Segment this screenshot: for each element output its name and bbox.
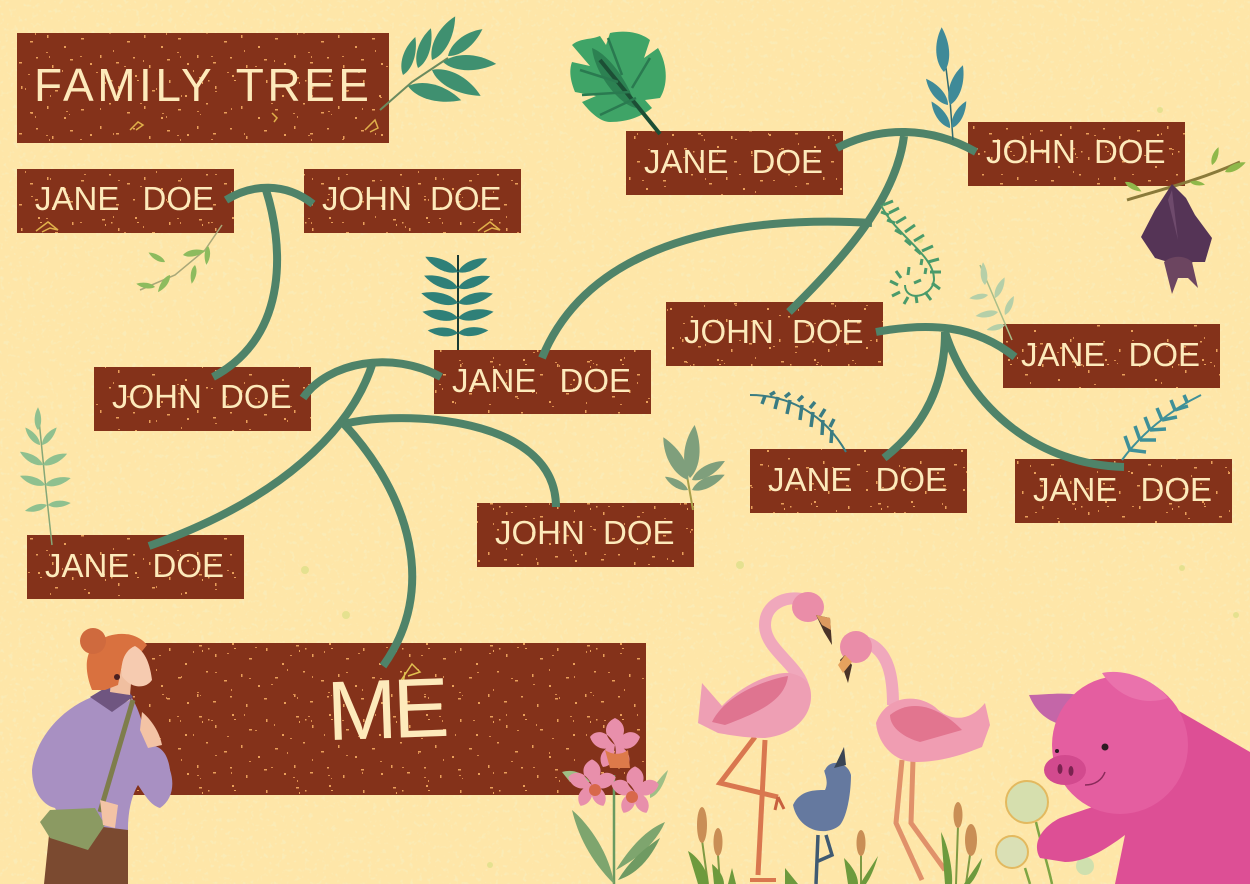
name box: Jane Doe, lower centre right: JANE DOE: [768, 461, 947, 498]
name box: John Doe, top right: JOHN DOE: [986, 133, 1166, 170]
icon: dark feather frond: [750, 392, 846, 452]
name box: Jane Doe, lower left: [27, 535, 244, 599]
icon: blue-green sprig: [922, 27, 970, 140]
icon: broad leaf cluster: [657, 424, 728, 510]
illustration: cattails and reeds: [688, 802, 982, 884]
name box: John Doe, middle left: JOHN DOE: [112, 378, 292, 415]
name box: John Doe, lower centre: JOHN DOE: [495, 514, 675, 551]
name box: Jane Doe, lower right: [1015, 459, 1232, 523]
name box: Jane Doe, top centre: JANE DOE: [644, 143, 823, 180]
name box: John Doe, middle left: [94, 367, 311, 431]
title: FAMILY TREE: [34, 59, 372, 111]
icon: teal fern frond: [1122, 395, 1201, 460]
name box: John Doe, centre right: JOHN DOE: [684, 313, 864, 350]
icon: pale leaf sprig, left: [18, 407, 72, 545]
illustration: flamingo, right: [838, 631, 990, 880]
icon: monstera leaf: [570, 32, 666, 134]
name box: Jane Doe, top centre: [626, 131, 843, 195]
name box: John Doe, top left: JOHN DOE: [322, 180, 502, 217]
name box: Jane Doe, right: JANE DOE: [1021, 336, 1200, 373]
illustration: grey chick: [793, 747, 851, 884]
illustration: pink pig: [1029, 672, 1250, 884]
name box: Jane Doe, centre: [434, 350, 651, 414]
icon: branch with bat: [1124, 146, 1247, 294]
name box: John Doe, top right: [968, 122, 1185, 186]
illustration: woman with bag: [32, 628, 172, 884]
name box: John Doe, centre right: [666, 302, 883, 366]
name box: John Doe, top left: [304, 169, 521, 233]
icon: dark fern: [420, 252, 494, 350]
title panel: [17, 33, 389, 143]
icon: olive sprig: [136, 225, 222, 294]
name box: Jane Doe, lower left: JANE DOE: [45, 547, 224, 584]
name box: Jane Doe, top left: [17, 169, 234, 233]
name box: Jane Doe, lower centre right: [750, 449, 967, 513]
icon: pale leaf sprig, right: [969, 262, 1016, 340]
name box: Jane Doe, right: [1003, 324, 1220, 388]
name box: Jane Doe, centre: JANE DOE: [452, 362, 631, 399]
panel: Me: ME: [325, 660, 451, 758]
name box: Jane Doe, top left: JANE DOE: [35, 180, 214, 217]
illustration: dandelions: [996, 781, 1094, 884]
tree connectors: [149, 132, 1124, 666]
icon: curling fern: [881, 201, 941, 304]
illustration: flamingo, left: [698, 592, 832, 880]
icon: leafy branch by title: [380, 13, 496, 110]
panel: Me: [130, 643, 646, 795]
name box: Jane Doe, lower right: JANE DOE: [1033, 471, 1212, 508]
name box: John Doe, lower centre: [477, 503, 694, 567]
illustration: orchid flower: [562, 718, 668, 884]
